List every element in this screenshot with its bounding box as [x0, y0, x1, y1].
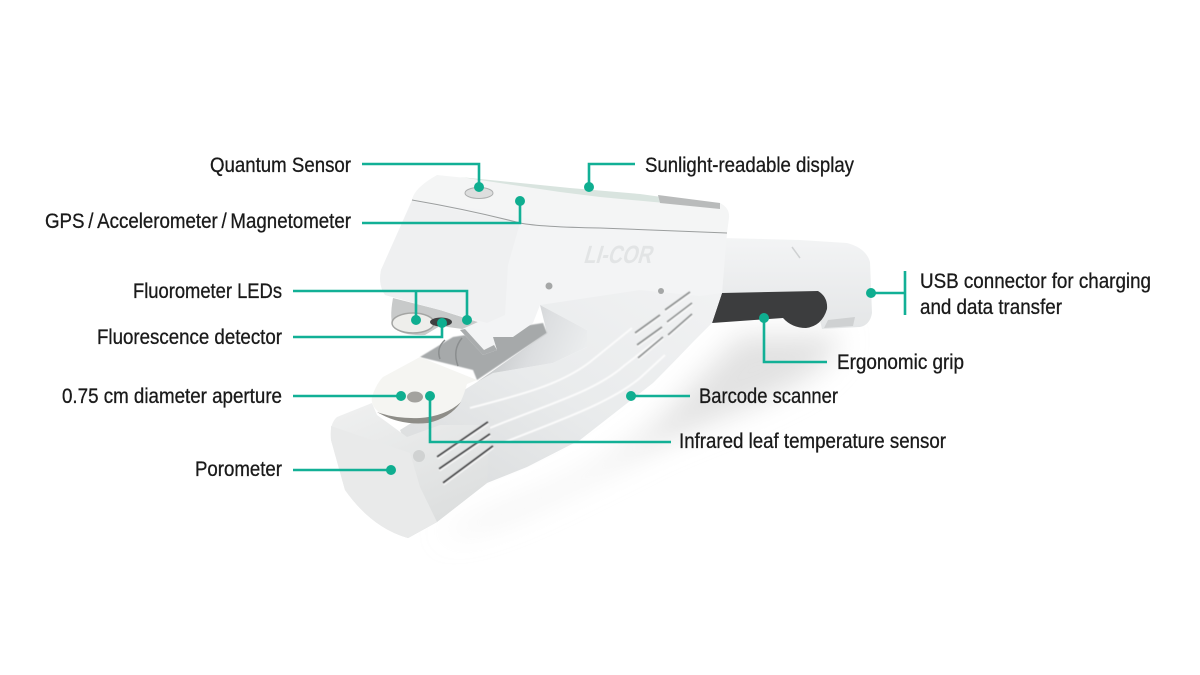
callout: Sunlight-readable display [584, 154, 854, 192]
front vents [437, 422, 493, 484]
head top cap [412, 175, 729, 233]
callout: Ergonomic grip: Ergonomic grip [837, 351, 964, 374]
upper vents [635, 292, 692, 359]
side screw hole [413, 450, 425, 462]
quantum sensor [465, 188, 493, 198]
callout: USB connector: and data transfer [920, 296, 1062, 319]
detector window [430, 318, 452, 326]
claw underside shading [460, 329, 497, 355]
display [460, 177, 720, 205]
lower jaw block [331, 403, 490, 538]
callout: GPS / Accelerometer / Magnetometer [45, 196, 525, 233]
callout: Quantum Sensor [210, 154, 484, 192]
sculpted body ridges [470, 328, 665, 442]
LED lens [392, 313, 434, 333]
jaw tip front face [331, 426, 437, 538]
clamp mechanism [420, 323, 547, 380]
callout: Infrared leaf temperature sensor [425, 391, 946, 453]
brand mark: LI-COR [581, 241, 657, 269]
side screws [546, 282, 664, 294]
upper head [380, 200, 727, 355]
callout: Sunlight-readable display: Sunlight-readable display [645, 154, 854, 177]
handle port recess [824, 317, 855, 328]
aperture disc edge [377, 402, 461, 424]
aperture arm [372, 357, 477, 421]
callout: Porometer: Porometer [195, 458, 282, 481]
callout: Barcode scanner [626, 385, 838, 408]
device illustration [331, 175, 872, 538]
callout: Barcode scanner: Barcode scanner [699, 385, 838, 408]
aperture opening [407, 392, 423, 402]
callout: USB connector [866, 270, 1151, 319]
LED housing [391, 298, 478, 335]
cap seam [412, 200, 727, 233]
head left face [380, 201, 520, 323]
callout: Fluorescence detector [97, 318, 447, 349]
callout: Ergonomic grip [759, 313, 964, 374]
callout: aperture: 0.75 cm diameter aperture [62, 385, 282, 408]
callout: Fluorometer LEDs [133, 280, 472, 325]
display clip [658, 195, 720, 209]
callout: GPS / Accelerometer / Magnetometer: GPS / Accelerometer / Magnetometer [45, 210, 351, 233]
clamp fingers [439, 338, 462, 366]
callout: Porometer [195, 458, 396, 481]
callout: USB connector: USB connector for charging [920, 270, 1151, 293]
ergonomic rubber grip [712, 291, 827, 328]
body recess [477, 305, 587, 382]
handle seam [792, 247, 800, 258]
callout: Quantum Sensor: Quantum Sensor [210, 154, 351, 177]
device handle [722, 238, 872, 329]
callout: Infrared leaf temperature sensor: Infrared leaf temperature sensor [679, 430, 946, 453]
callout: Fluorometer LEDs: Fluorometer LEDs [133, 280, 282, 303]
main body [400, 226, 727, 538]
floor shadow [440, 335, 840, 535]
callout: Fluorescence detector: Fluorescence detector [97, 326, 282, 349]
